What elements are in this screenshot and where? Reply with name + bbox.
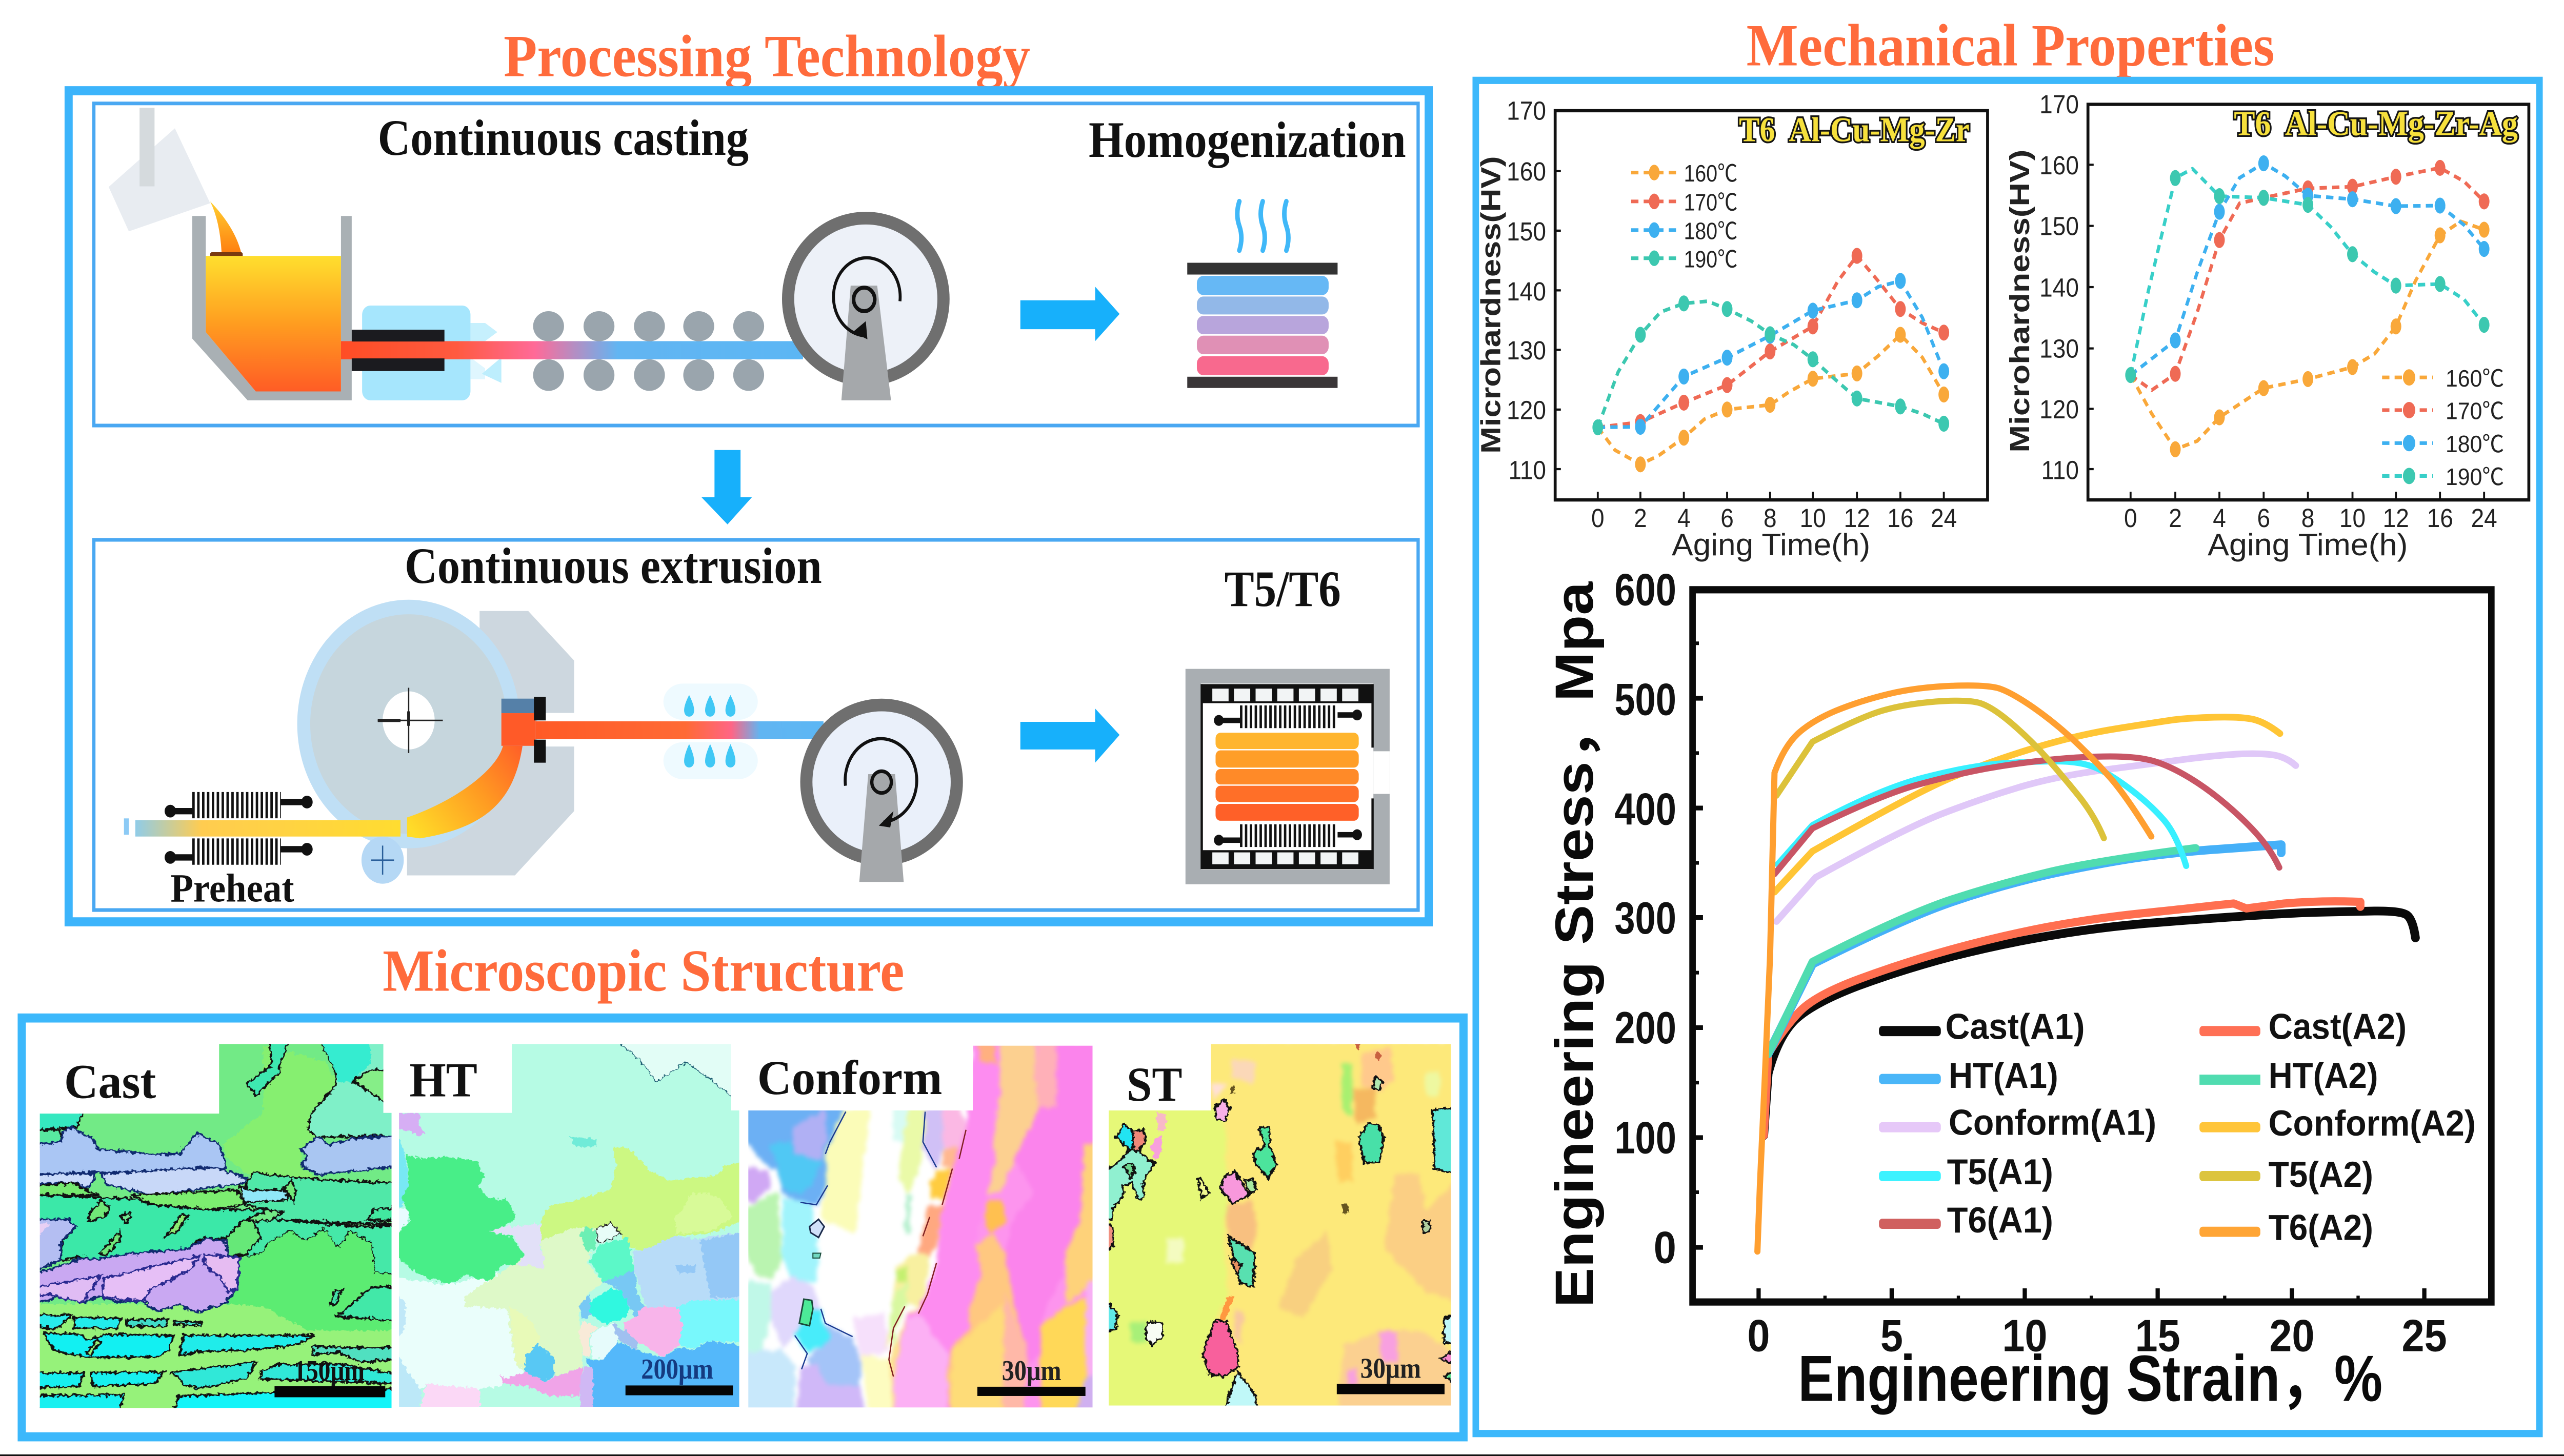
- y axis labels: 130: [2039, 334, 2079, 363]
- icon: coiling wheel 2: [800, 699, 963, 882]
- x axis labels: 2: [1634, 504, 1647, 533]
- legend: HT(A1): [1949, 1056, 2058, 1096]
- map: ST: [1102, 1040, 1460, 1413]
- legend: Conform(A2): [2269, 1103, 2476, 1144]
- legend: HT(A2): [2269, 1056, 2378, 1096]
- x axis labels: 0: [2124, 504, 2137, 533]
- x axis labels: 8: [1764, 504, 1777, 533]
- icon: extruded rod: [535, 721, 824, 739]
- y axis labels: 130: [1507, 336, 1546, 365]
- x axis labels: 6: [2257, 504, 2270, 533]
- panel: microscopic structure: [22, 1018, 1464, 1437]
- label: preheat: Preheat: [170, 866, 294, 910]
- axis title y: Microhardness(HV): [1475, 156, 1507, 454]
- scale bar: 30 µm: [977, 1354, 1086, 1396]
- curve: Cast(A1): [1764, 911, 2415, 1136]
- x axis labels: 6: [1720, 504, 1734, 533]
- legend: T6(A2): [2269, 1207, 2373, 1248]
- icon: mould blocks: [352, 330, 445, 371]
- y axis labels: 170: [1507, 96, 1546, 126]
- y axis labels: 110: [1509, 456, 1546, 485]
- series: 180 °C: [1598, 281, 1944, 428]
- icon: T5/T6 furnace: [1186, 669, 1390, 884]
- x axis labels: 25: [2402, 1310, 2447, 1361]
- legend: 160℃: [2446, 366, 2504, 392]
- curve: HT(A1): [1768, 845, 2281, 1054]
- icon: tundish: [192, 216, 352, 400]
- x axis labels: 4: [1677, 504, 1690, 533]
- y axis labels: 170: [2039, 90, 2079, 119]
- chart: stress-strain: [1544, 564, 2491, 1415]
- legend: [2382, 366, 2504, 491]
- axis title y: Microhardness(HV): [2005, 150, 2035, 453]
- label: ST: ST: [1127, 1057, 1182, 1111]
- curves: [1757, 685, 2415, 1251]
- y axis labels: 160: [2039, 151, 2079, 180]
- x axis labels: 10: [2002, 1310, 2048, 1361]
- y axis labels: 150: [2039, 212, 2079, 241]
- axis title x: Aging Time(h): [2208, 528, 2408, 562]
- curve: T5(A2): [1776, 701, 2104, 838]
- label: T5/T6: T5/T6: [1225, 561, 1341, 617]
- series: 190 °C: [2131, 169, 2484, 375]
- y axis labels: 140: [2039, 273, 2079, 302]
- x axis labels: 4: [2213, 504, 2226, 533]
- x axis labels: 8: [2301, 504, 2314, 533]
- title: Mechanical Properties: Mechanical Properties: [1747, 12, 2275, 79]
- series: 190 °C: [1598, 301, 1944, 428]
- legend: [1631, 160, 1737, 273]
- legend: T5(A1): [1947, 1152, 2053, 1192]
- label: Cast: Cast: [64, 1054, 156, 1108]
- x axis labels: 5: [1880, 1310, 1903, 1361]
- x axis labels: 15: [2135, 1310, 2180, 1361]
- y axis labels: 160: [1507, 157, 1546, 187]
- label: continuous extrusion: Continuous extrusion: [405, 538, 822, 594]
- curve: T6(A1): [1774, 756, 2279, 874]
- legend: T6(A1): [1947, 1200, 2053, 1241]
- curve: Conform(A1): [1776, 754, 2296, 921]
- legend: Cast(A1): [1946, 1007, 2085, 1047]
- x axis labels: [1591, 504, 1957, 533]
- y axis labels: 400: [1614, 784, 1676, 835]
- axis title y: Engineering Stress，Mpa: [1544, 581, 1604, 1308]
- curve: T6(A2): [1757, 685, 2151, 1251]
- x axis labels: 24: [1931, 504, 1957, 533]
- legend: 170℃: [1684, 190, 1737, 216]
- y axis labels: 140: [1507, 277, 1546, 306]
- y axis labels: [2039, 90, 2079, 485]
- x axis labels: 16: [1887, 504, 1913, 533]
- icon: steam: [1237, 201, 1288, 250]
- y axis labels: 120: [2039, 395, 2079, 424]
- icon: preheated feed: [124, 746, 523, 838]
- icon: small roll: [362, 837, 404, 884]
- scale bar: 30 µm: 30μm: [1002, 1354, 1061, 1387]
- panel: processing technology: [69, 91, 1429, 922]
- y axis labels: 600: [1614, 564, 1676, 615]
- x axis labels: 2: [2169, 504, 2182, 533]
- icon: cooling block: [362, 306, 502, 400]
- x axis labels: 16: [2427, 504, 2453, 533]
- icon: coiling wheel: [782, 212, 950, 400]
- y axis labels: 200: [1614, 1002, 1676, 1053]
- series: 170 °C: [2131, 168, 2484, 390]
- label: Conform: Conform: [757, 1050, 942, 1105]
- legend: [1879, 1007, 2476, 1248]
- curve: HT(A2): [1768, 848, 2196, 1054]
- x axis labels: 12: [1844, 504, 1870, 533]
- title: Processing Technology: Processing Technology: [504, 24, 1030, 90]
- icon: ladle: [109, 108, 210, 231]
- scale bar: 200 µm: [626, 1353, 733, 1396]
- legend: Cast(A2): [2269, 1007, 2407, 1047]
- axis title x: Engineering Strain，%: [1798, 1342, 2382, 1415]
- y axis labels: [1614, 564, 1676, 1272]
- series: 160 °C: [1598, 335, 1944, 464]
- y axis labels: 120: [1507, 396, 1546, 425]
- scale bar: 200 µm: 200μm: [641, 1353, 713, 1385]
- panel: mechanical properties: [1475, 80, 2539, 1433]
- label: homogenization: Homogenization: [1089, 112, 1406, 168]
- curve: Conform(A2): [1774, 717, 2280, 892]
- icon: rollers: [533, 311, 764, 391]
- y axis labels: 300: [1614, 893, 1676, 943]
- y axis labels: [1507, 96, 1546, 485]
- legend: 190℃: [1684, 246, 1737, 273]
- x axis labels: 0: [1747, 1310, 1770, 1361]
- scale bar: 30 µm: 30μm: [1360, 1352, 1421, 1384]
- scale bar: 30 µm: [1337, 1352, 1445, 1394]
- series: 180 °C: [2131, 164, 2484, 375]
- x axis labels: 10: [2339, 504, 2366, 533]
- icon: water drops: [664, 683, 758, 779]
- icon: preheat coils: [165, 796, 313, 864]
- legend: 180℃: [1684, 218, 1737, 245]
- series: 160 °C: [2131, 221, 2484, 449]
- icon: extrusion wheel: [297, 600, 520, 848]
- icon: die block: [407, 611, 574, 875]
- chart: microhardness Al-Cu-Mg-Zr-Ag: [2005, 90, 2529, 562]
- y axis labels: 100: [1614, 1112, 1676, 1163]
- legend: T5(A2): [2269, 1155, 2373, 1195]
- scale bar: 150 µm: 150μm: [294, 1354, 365, 1387]
- icon: casting rod: [341, 341, 803, 359]
- title: Microscopic Structure: Microscopic Structure: [383, 938, 904, 1004]
- map: HT: [397, 1040, 744, 1413]
- x axis labels: 0: [1591, 504, 1605, 533]
- legend: 190℃: [2446, 464, 2504, 491]
- curve: T5(A1): [1778, 761, 2186, 866]
- arrow: down: [702, 450, 752, 524]
- series: 170 °C: [1598, 256, 1944, 428]
- y axis labels: 0: [1654, 1222, 1676, 1272]
- legend: 170℃: [2446, 398, 2504, 424]
- y axis labels: 500: [1614, 674, 1676, 725]
- legend: 180℃: [2446, 431, 2504, 458]
- legend: 160℃: [1684, 160, 1737, 187]
- icon: die chamber: [502, 697, 546, 763]
- x axis labels: [1747, 1310, 2447, 1361]
- icon: molten stream: [210, 201, 243, 258]
- badge: T6 Al-Cu-Mg-Zr-Ag: T6 Al-Cu-Mg-Zr-Ag: [2234, 104, 2518, 143]
- badge: T6 Al-Cu-Mg-Zr: T6 Al-Cu-Mg-Zr: [1739, 110, 1970, 149]
- map: Cast: [37, 1040, 397, 1413]
- y axis labels: 150: [1507, 217, 1546, 247]
- legend: Conform(A1): [1949, 1102, 2156, 1143]
- y axis labels: 110: [2041, 456, 2079, 485]
- icon: homogenization stack: [1187, 263, 1337, 388]
- map: Conform: [742, 1040, 1105, 1418]
- scale bar: 150 µm: [274, 1354, 385, 1397]
- chart: microhardness Al-Cu-Mg-Zr: [1475, 96, 1988, 562]
- x axis labels: 10: [1800, 504, 1826, 533]
- x axis labels: 20: [2269, 1310, 2314, 1361]
- panel: continuous casting: [94, 104, 1418, 426]
- curve: Cast(A2): [1764, 901, 2360, 1136]
- label: HT: HT: [409, 1053, 477, 1107]
- page bottom edge line: [0, 1454, 2564, 1456]
- label: continuous casting: Continuous casting: [378, 110, 749, 166]
- x axis labels: 12: [2383, 504, 2409, 533]
- axis title x: Aging Time(h): [1672, 528, 1870, 562]
- x axis labels: 24: [2471, 504, 2497, 533]
- arrow: to homogenization: [1020, 287, 1119, 341]
- arrow: to T5/T6: [1020, 709, 1119, 763]
- x axis labels: [2124, 504, 2497, 533]
- panel: continuous extrusion: [94, 538, 1418, 910]
